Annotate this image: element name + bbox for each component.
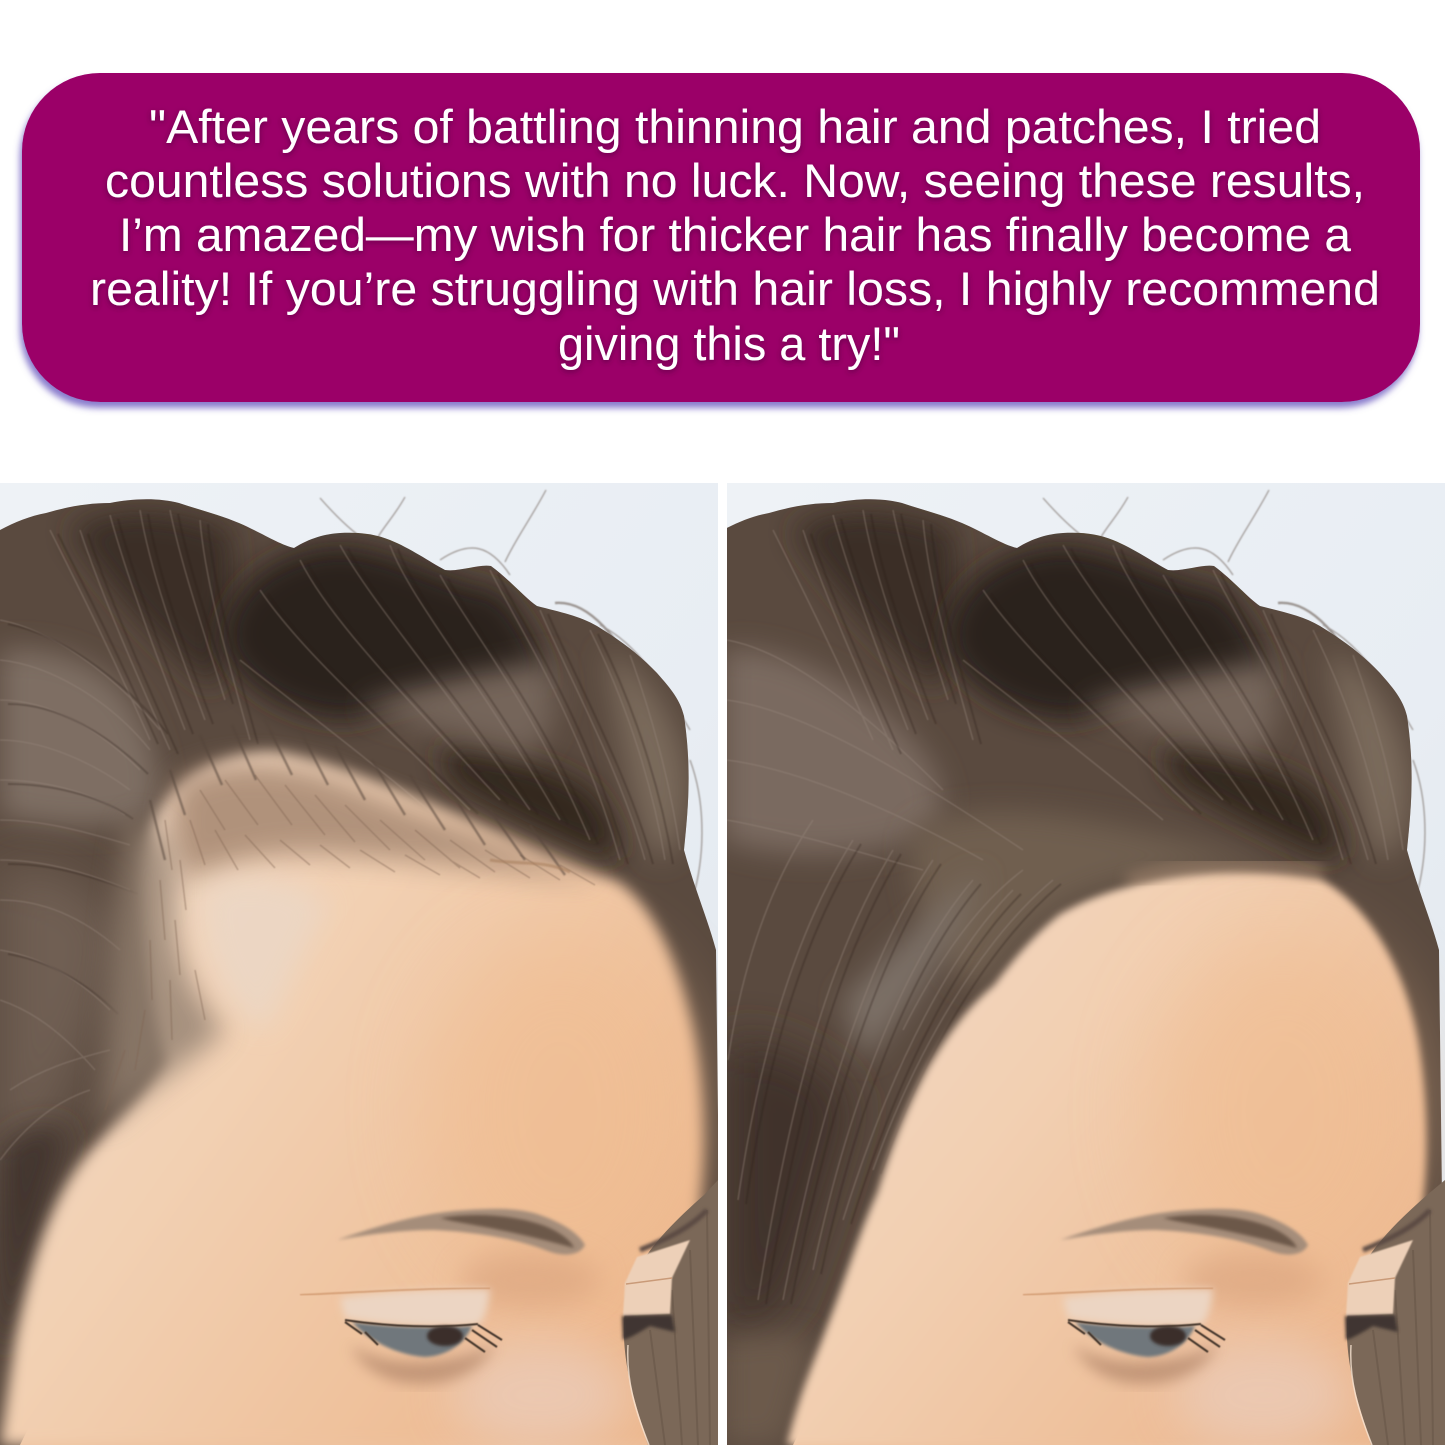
hair mass — [723, 483, 1445, 1445]
before photo: thinning hairline — [0, 483, 722, 1445]
far eye — [622, 1315, 675, 1340]
far brow — [640, 1210, 707, 1250]
glossy highlight — [1083, 660, 1280, 755]
glossy highlight — [360, 660, 557, 755]
flyaway hairs — [320, 490, 702, 890]
far eye — [1345, 1315, 1398, 1340]
eye — [1068, 1320, 1225, 1357]
face edge highlight — [1351, 1345, 1372, 1445]
skin: forehead and face — [0, 752, 703, 1445]
hairline warm edge — [1127, 865, 1323, 882]
testimonial quote text: countless solutions with no luck. Now, seeing these results, — [105, 154, 1365, 207]
hair strands light — [727, 510, 1403, 1300]
eyebrow — [1060, 1209, 1308, 1255]
far eyelid — [623, 1240, 690, 1316]
dark lower-left hair — [0, 1126, 70, 1350]
facial features — [1023, 1209, 1430, 1384]
flyaway hairs — [1043, 490, 1425, 890]
dark lower wave — [1163, 745, 1340, 860]
dark central clump — [222, 545, 548, 720]
hair mass — [0, 483, 722, 1445]
hair strands light — [0, 510, 680, 1160]
brow shadow — [1183, 1252, 1323, 1308]
dark lower-left hair — [723, 1040, 853, 1340]
chin-level skin base — [20, 1434, 648, 1445]
dark upper hair — [793, 511, 956, 690]
lighter temple hair — [723, 649, 942, 854]
under-eye shadow — [350, 1345, 495, 1384]
lighter right fringe — [1328, 650, 1409, 860]
far brow — [1363, 1210, 1430, 1250]
thinning zone haze — [171, 764, 600, 880]
hair strands dark — [746, 514, 1376, 1304]
facial features — [300, 1209, 707, 1384]
eyelid crease — [1023, 1288, 1213, 1295]
testimonial quote text: giving this a try!" — [558, 317, 900, 370]
pink lower cheek — [450, 1340, 630, 1445]
hair strands dark — [8, 514, 673, 1014]
testimonial quote text: reality! If you’re struggling with hair loss, I highly recommend — [90, 262, 1380, 315]
baby hairs — [150, 774, 596, 1040]
eye — [345, 1320, 502, 1357]
testimonial pill — [22, 73, 1420, 402]
hair roots over hairline edge — [149, 742, 566, 876]
rear hair strands — [1373, 1210, 1433, 1445]
after photo: restored hairline — [723, 483, 1445, 1445]
under-eye shadow — [1073, 1345, 1218, 1384]
eyelid crease — [300, 1288, 490, 1295]
chin-level skin base — [793, 1425, 1371, 1445]
forehead warm shade — [452, 954, 718, 1198]
testimonial quote text — [90, 100, 1380, 370]
left sparse column — [100, 820, 225, 1130]
eyelid — [1063, 1289, 1213, 1326]
testimonial quote text: I’m amazed—my wish for thicker hair has finally become a — [119, 208, 1352, 261]
face edge highlight — [628, 1345, 649, 1445]
eyebrow — [337, 1209, 585, 1255]
testimonial quote text: "After years of battling thinning hair and patches, I tried — [149, 100, 1321, 153]
lower temple hair — [0, 866, 111, 1138]
eyelid — [340, 1289, 490, 1326]
pale scalp patch — [213, 876, 318, 1018]
skin: forehead and face — [787, 872, 1426, 1445]
lighter temple hair — [0, 649, 158, 826]
forehead warm shade — [1153, 940, 1413, 1280]
far eyelid — [1346, 1240, 1413, 1316]
lighter right fringe — [605, 650, 686, 860]
dark central clump — [945, 545, 1271, 720]
brow shadow — [460, 1252, 600, 1308]
rear hair behind nose — [1347, 1180, 1445, 1445]
rear hair behind nose — [624, 1180, 718, 1445]
pink lower cheek — [1173, 1340, 1353, 1445]
grey glossy patch — [843, 870, 983, 1060]
lower hair fading brown — [723, 1334, 813, 1445]
hairline reddish line — [490, 860, 570, 872]
restored hair band — [911, 811, 1283, 990]
dark lower wave — [440, 745, 617, 860]
rear hair strands — [650, 1210, 710, 1445]
dark upper hair — [70, 511, 233, 690]
